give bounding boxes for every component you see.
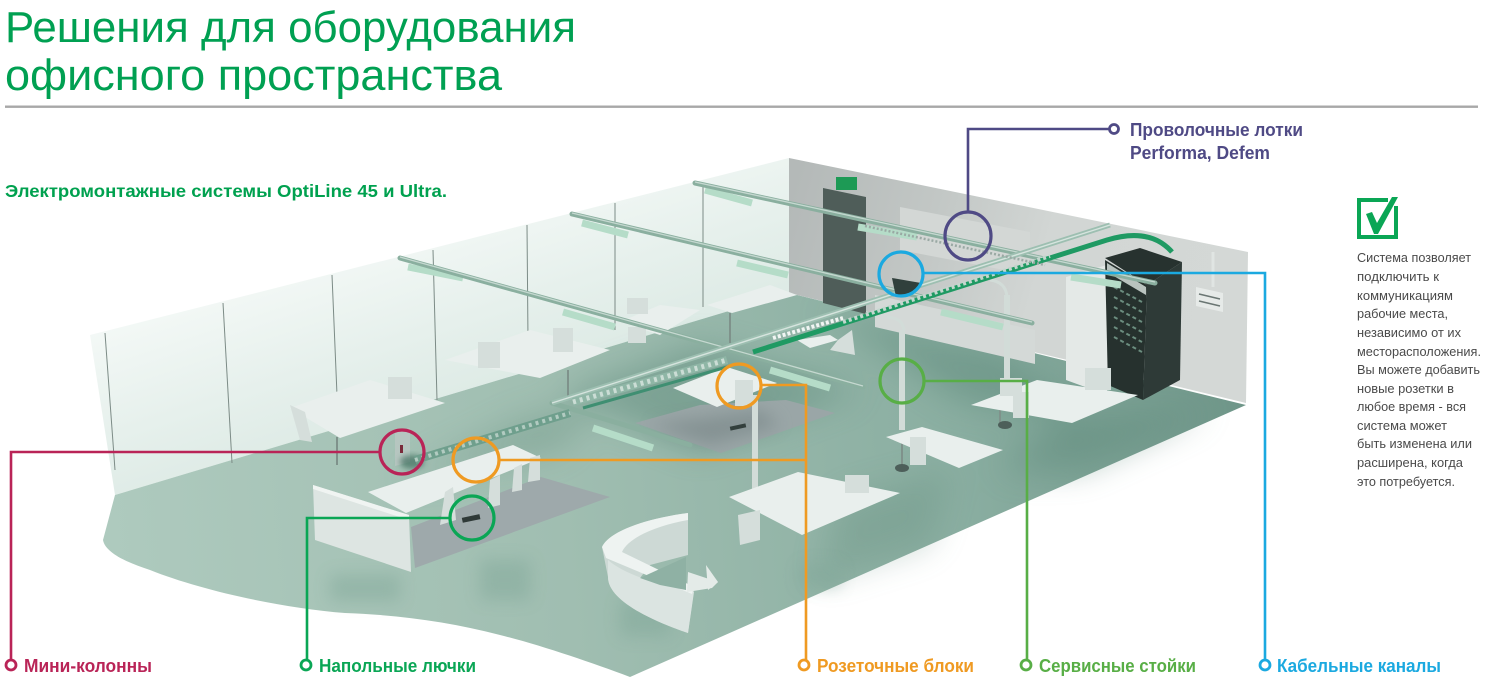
title: офисного пространства <box>5 51 503 100</box>
description text: Вы можете добавить <box>1357 363 1480 377</box>
icon: checkbox <box>1359 197 1398 237</box>
description text: система может <box>1357 419 1447 433</box>
back wall <box>789 158 1248 403</box>
description text: расширена, когда <box>1357 456 1463 470</box>
electrical panel <box>1196 252 1223 312</box>
description text: независимо от их <box>1357 326 1462 340</box>
cable trays <box>415 225 1172 460</box>
callout: Мини-колонны <box>6 452 380 676</box>
callout: Проволочные лотки: Проволочные лотки <box>1130 120 1303 140</box>
exit sign <box>836 177 857 190</box>
callout ring: crimson <box>380 430 424 474</box>
callout ring: floor green <box>450 496 494 540</box>
desk legs and mini columns <box>337 313 1012 540</box>
riser column <box>1066 265 1107 395</box>
description text: это потребуется. <box>1357 475 1455 489</box>
chairs and screens <box>290 298 1111 545</box>
description text: подключить к <box>1357 270 1440 284</box>
callout: Кабельные каналы: Кабельные каналы <box>1277 656 1441 676</box>
trunking device <box>892 278 921 297</box>
subtitle: Электромонтажные системы OptiLine 45 и Ultra. <box>5 181 447 201</box>
description text: новые розетки в <box>1357 382 1454 396</box>
server rack <box>1105 248 1182 400</box>
callout ring: service green <box>880 359 924 403</box>
callout: Проволочные лотки: Performa, Defem <box>1130 143 1270 163</box>
cabinets <box>875 295 1035 364</box>
description text: месторасположения. <box>1357 345 1481 359</box>
description text <box>1357 251 1481 489</box>
callout ring: blue <box>879 252 923 296</box>
ceiling beams and lamps <box>400 182 1155 448</box>
callout: Сервисные стойки <box>924 381 1196 676</box>
reception counter <box>602 513 718 633</box>
callout ring: orange upper <box>717 364 761 408</box>
callout ring: orange lower <box>453 438 499 482</box>
description text: рабочие места, <box>1357 307 1448 321</box>
callout: Напольные лючки <box>301 518 476 676</box>
desks <box>290 285 1138 535</box>
floor boxes <box>462 514 480 523</box>
door <box>823 188 866 314</box>
description text: любое время - вся <box>1357 400 1466 414</box>
meeting table front counter <box>313 485 411 572</box>
title: Решения для оборудования <box>5 3 576 52</box>
glass mullions <box>105 183 703 470</box>
description text: быть изменена или <box>1357 437 1472 451</box>
carpet zones <box>411 477 610 568</box>
callout: Розеточные блоки: Розеточные блоки <box>817 656 974 676</box>
callout: Мини-колонны: Мини-колонны <box>24 656 152 676</box>
service poles <box>755 280 1007 490</box>
callout: Розеточные блоки <box>499 385 974 676</box>
description text: коммуникациям <box>1357 289 1453 303</box>
office floor plan illustration <box>90 158 1248 677</box>
floor reflections <box>400 310 1210 580</box>
callout: Напольные лючки: Напольные лючки <box>319 656 476 676</box>
callout: Проволочные лотки <box>968 120 1303 213</box>
floor <box>103 293 1246 677</box>
callout: Кабельные каналы <box>922 273 1441 676</box>
title <box>5 3 576 100</box>
callout: Сервисные стойки: Сервисные стойки <box>1039 656 1196 676</box>
description text: Система позволяет <box>1357 251 1471 265</box>
callout ring: purple <box>945 212 991 260</box>
glass partition wall <box>90 158 789 495</box>
